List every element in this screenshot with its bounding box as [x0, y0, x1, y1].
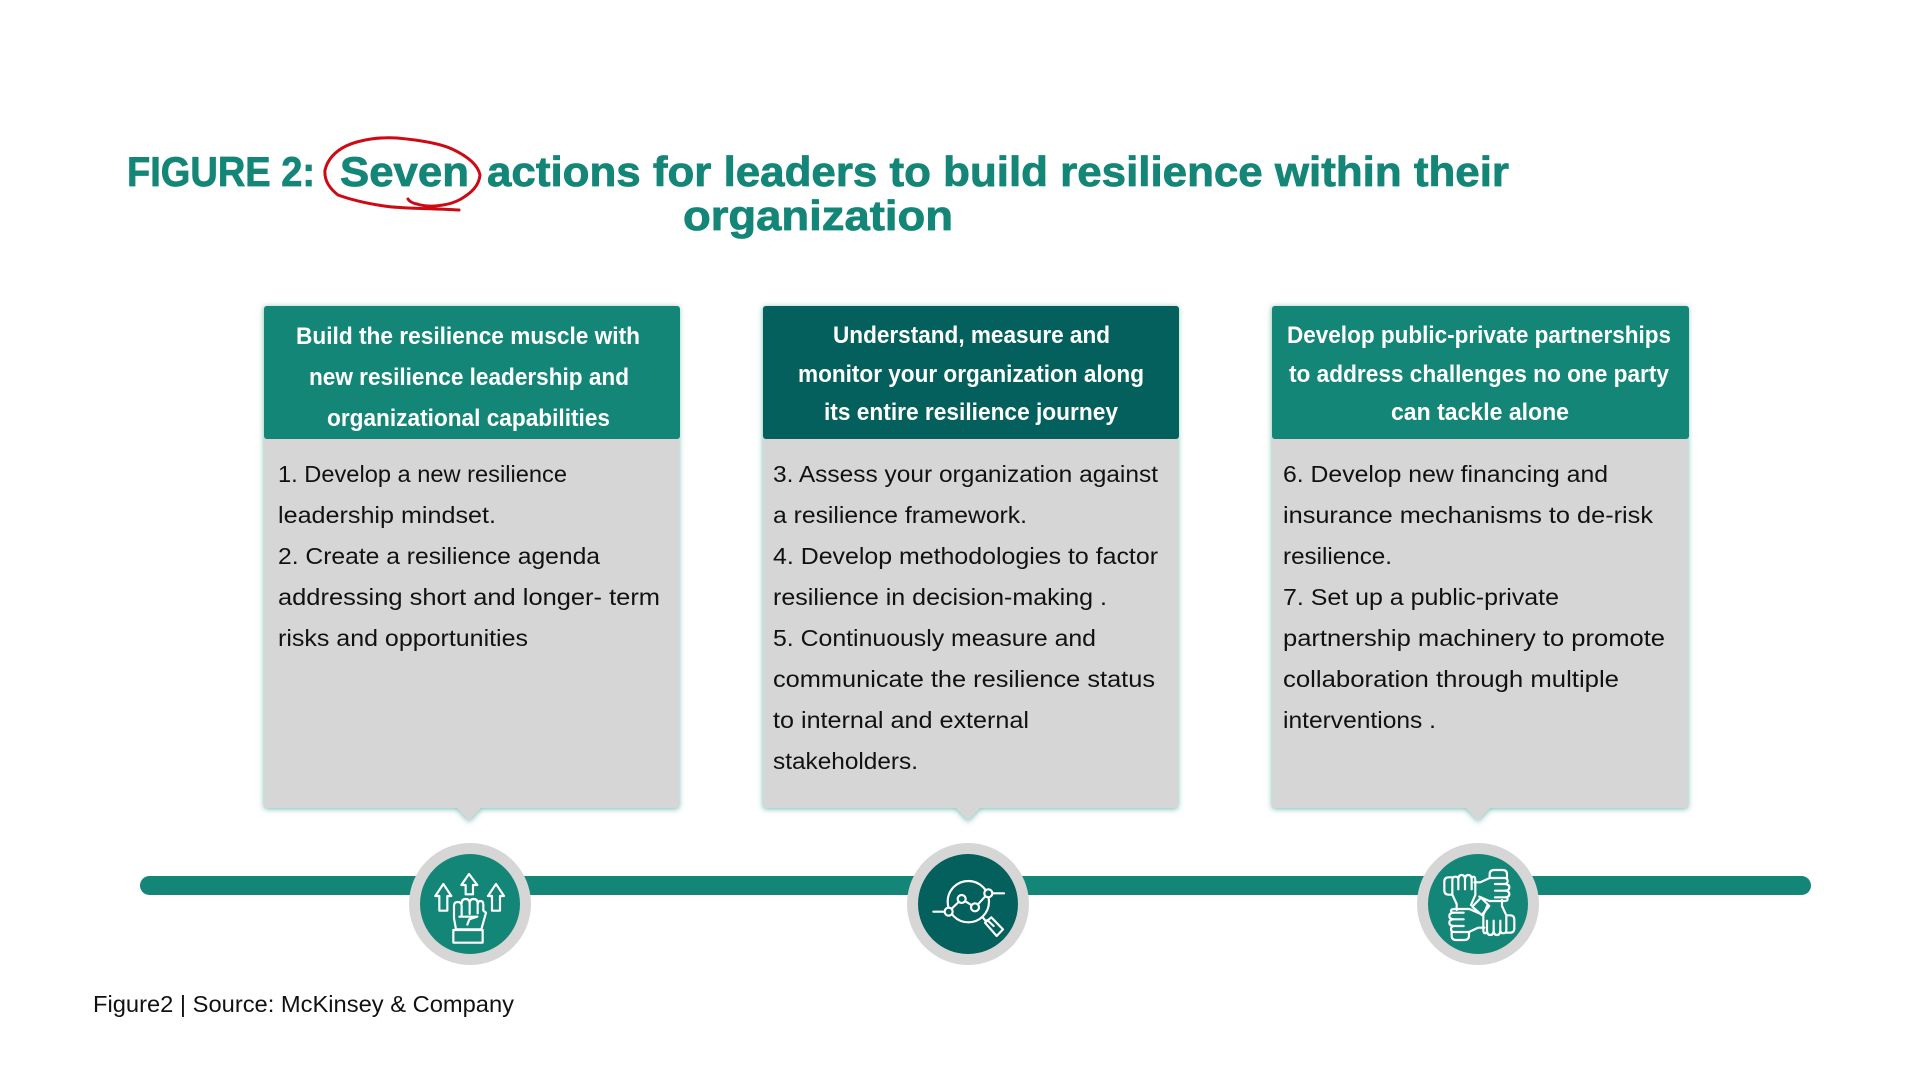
header text: Build the resilience muscle with	[296, 323, 640, 350]
header text: Develop public-private partnerships	[1287, 322, 1671, 349]
action list 1-2: leadership mindset.	[278, 502, 496, 528]
action list 6-7: resilience.	[1283, 543, 1392, 569]
action list 1-2	[278, 461, 660, 651]
action list 3-5: stakeholders.	[773, 748, 918, 774]
title: FIGURE 2:	[127, 148, 315, 195]
header text	[798, 322, 1144, 426]
action list 3-5	[773, 461, 1159, 774]
header text	[296, 323, 640, 432]
action list 6-7: partnership machinery to promote	[1283, 625, 1665, 651]
action list 6-7: collaboration through multiple	[1283, 666, 1619, 692]
panel: understand, measure and monitor	[763, 306, 1179, 821]
action list 1-2: risks and opportunities	[278, 625, 528, 651]
title: Seven	[340, 148, 469, 195]
header text: to address challenges no one party	[1289, 361, 1670, 388]
title	[127, 148, 1509, 239]
icon: raised fist with arrows	[409, 843, 531, 965]
panel header	[1272, 306, 1689, 439]
header text: new resilience leadership and	[309, 364, 629, 391]
action list 3-5: 5. Continuously measure and	[773, 625, 1096, 651]
title: organization	[683, 192, 953, 239]
source note: Figure2 | Source: McKinsey & Company	[93, 991, 515, 1017]
panel header	[763, 306, 1179, 439]
action list 1-2: 2. Create a resilience agenda	[278, 543, 600, 569]
action list 3-5: communicate the resilience status	[773, 666, 1155, 692]
icon: four interlocked hands	[1417, 843, 1539, 965]
action list 3-5: a resilience framework.	[773, 502, 1027, 528]
panel: public-private partnerships	[1272, 306, 1689, 821]
header text: organizational capabilities	[327, 405, 610, 432]
header text: its entire resilience journey	[824, 399, 1119, 426]
header text	[1287, 322, 1671, 426]
timeline bar	[140, 876, 1811, 895]
action list 6-7: 6. Develop new financing and	[1283, 461, 1608, 487]
panel: build the resilience muscle	[264, 306, 680, 821]
action list 3-5: 3. Assess your organization against	[773, 461, 1159, 487]
action list 6-7: 7. Set up a public-private	[1283, 584, 1559, 610]
action list 1-2: addressing short and longer- term	[278, 584, 660, 610]
action list 3-5: resilience in decision-making .	[773, 584, 1107, 610]
header text: Understand, measure and	[833, 322, 1110, 349]
action list 3-5: 4. Develop methodologies to factor	[773, 543, 1158, 569]
action list 3-5: to internal and external	[773, 707, 1029, 733]
panel header	[264, 306, 680, 439]
header text: can tackle alone	[1391, 399, 1569, 426]
icon: magnifier over line chart	[907, 843, 1029, 965]
title: actions for leaders to build resilience within their	[487, 148, 1509, 195]
panel body	[1272, 306, 1688, 821]
red hand-drawn circle around Seven	[325, 138, 480, 210]
action list 6-7	[1283, 461, 1665, 733]
panel body	[264, 306, 679, 821]
action list 1-2: 1. Develop a new resilience	[278, 461, 567, 487]
action list 6-7: interventions .	[1283, 707, 1436, 733]
header text: monitor your organization along	[798, 361, 1144, 388]
panel body	[763, 306, 1178, 821]
action list 6-7: insurance mechanisms to de-risk	[1283, 502, 1654, 528]
